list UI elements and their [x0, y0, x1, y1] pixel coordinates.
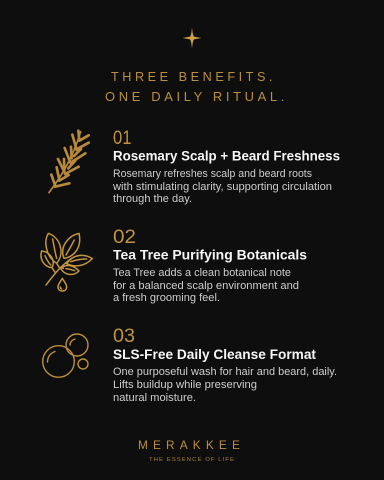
- panel: benefit 3 SLS-free: [43, 325, 337, 404]
- text block: SLS-free description: One purposeful wash for hair and beard, daily.: [113, 366, 337, 378]
- icon: tea tree branch with drop: [41, 233, 92, 291]
- text block: SLS-free description: Lifts buildup while preserving: [113, 379, 257, 391]
- number 03: 03: [113, 325, 135, 347]
- title: ONE DAILY RITUAL.: [105, 90, 288, 104]
- heading: tea tree: Tea Tree Purifying Botanicals: [113, 247, 307, 262]
- text block: rosemary description: [112, 168, 332, 205]
- text block: tea tree description: for a balanced scalp environment and: [113, 280, 299, 292]
- brand logo: Merakkee: MERAKKEE: [138, 440, 245, 452]
- text block: SLS-free description: [113, 366, 337, 404]
- number 02: 02: [113, 226, 136, 248]
- brand logo: Merakkee: [138, 440, 245, 463]
- text block: rosemary description: Rosemary refreshes scalp and beard roots: [113, 168, 313, 180]
- title: THREE BENEFITS.: [111, 70, 276, 84]
- text block: tea tree description: a fresh grooming feel.: [113, 292, 220, 304]
- text block: tea tree description: Tea Tree adds a clean botanical note: [113, 267, 291, 279]
- icon: four-point gold star: [182, 27, 202, 49]
- text block: rosemary description: with stimulating clarity, supporting circulation: [112, 181, 332, 193]
- heading: rosemary: Rosemary Scalp + Beard Freshness: [113, 148, 340, 164]
- text block: tea tree description: [113, 267, 299, 304]
- heading: SLS-free: SLS-Free Daily Cleanse Format: [113, 347, 317, 362]
- number 01: 01: [113, 127, 132, 149]
- text block: rosemary description: through the day.: [113, 193, 192, 205]
- text block: SLS-free description: natural moisture.: [113, 392, 196, 404]
- panel: benefit 2 tea tree: [41, 226, 307, 304]
- icon: rosemary sprig: [49, 131, 89, 193]
- tagline: THE ESSENCE OF LIFE: [149, 457, 235, 463]
- panel: benefit 1 rosemary: [49, 127, 340, 205]
- title: [105, 70, 288, 104]
- icon: bubbles: [43, 334, 88, 377]
